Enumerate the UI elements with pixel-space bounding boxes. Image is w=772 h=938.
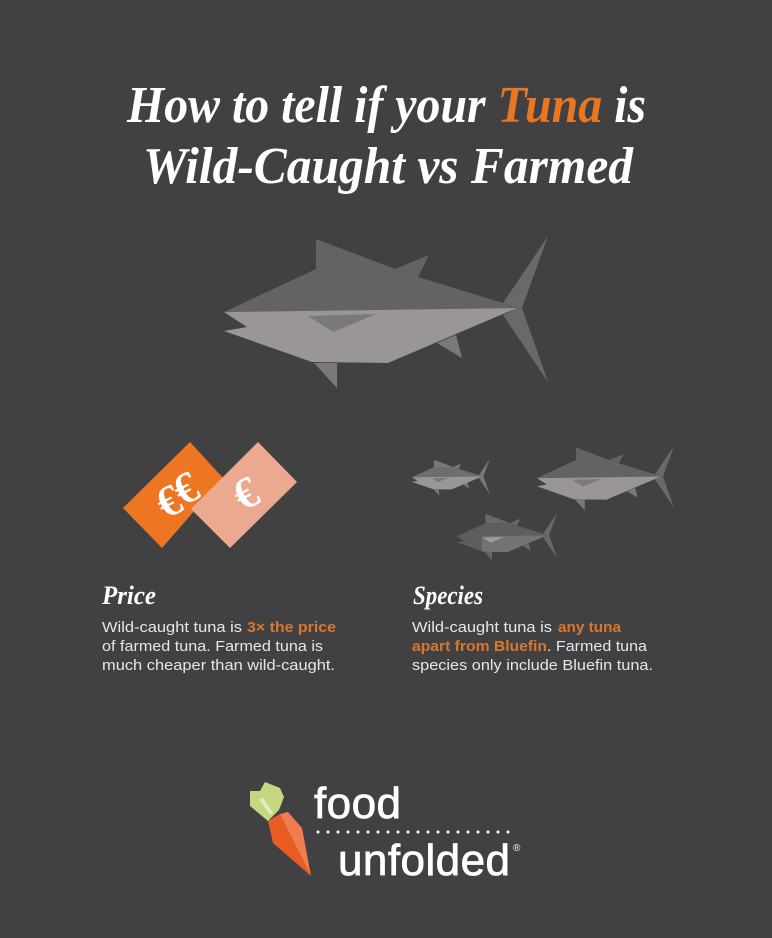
logo: food unfolded: ®: [513, 843, 521, 854]
panel: species text: any tuna: [558, 619, 622, 636]
panel: species text: apart from Bluefin: [412, 638, 547, 655]
logo: food unfolded: unfolded: [338, 836, 510, 885]
panel: price text: Wild-caught tuna is: [102, 619, 242, 636]
title: [126, 77, 646, 195]
logo: food unfolded: food: [314, 779, 401, 828]
logo: food unfolded: [250, 779, 521, 885]
icon: small tuna right: [537, 446, 674, 510]
panel: price text: of farmed tuna. Farmed tuna is: [102, 638, 323, 655]
icon: euro notes: €: [148, 475, 190, 528]
panel: species text: species only include Bluefin tuna.: [412, 657, 653, 674]
icon: euro notes: €: [165, 462, 207, 515]
icon: small tuna bottom: [457, 513, 557, 560]
title: How to tell if your Tuna is: [126, 77, 646, 134]
panel: price text: Price: [101, 581, 156, 610]
panel: price text: much cheaper than wild-caught.: [102, 657, 335, 674]
icon: small tuna left: [412, 459, 490, 496]
panel: species text: Species: [413, 581, 483, 610]
icon: large tuna: [224, 236, 548, 388]
panel: species text: [412, 581, 653, 674]
panel: price text: [101, 581, 336, 674]
panel: species text: . Farmed tuna: [547, 638, 648, 655]
panel: species text: Wild-caught tuna is: [412, 619, 552, 636]
icon: euro notes: [123, 442, 297, 548]
icon: euro notes: €: [225, 467, 267, 520]
title: Wild-Caught vs Farmed: [143, 138, 634, 195]
panel: price text: 3× the price: [247, 619, 336, 636]
